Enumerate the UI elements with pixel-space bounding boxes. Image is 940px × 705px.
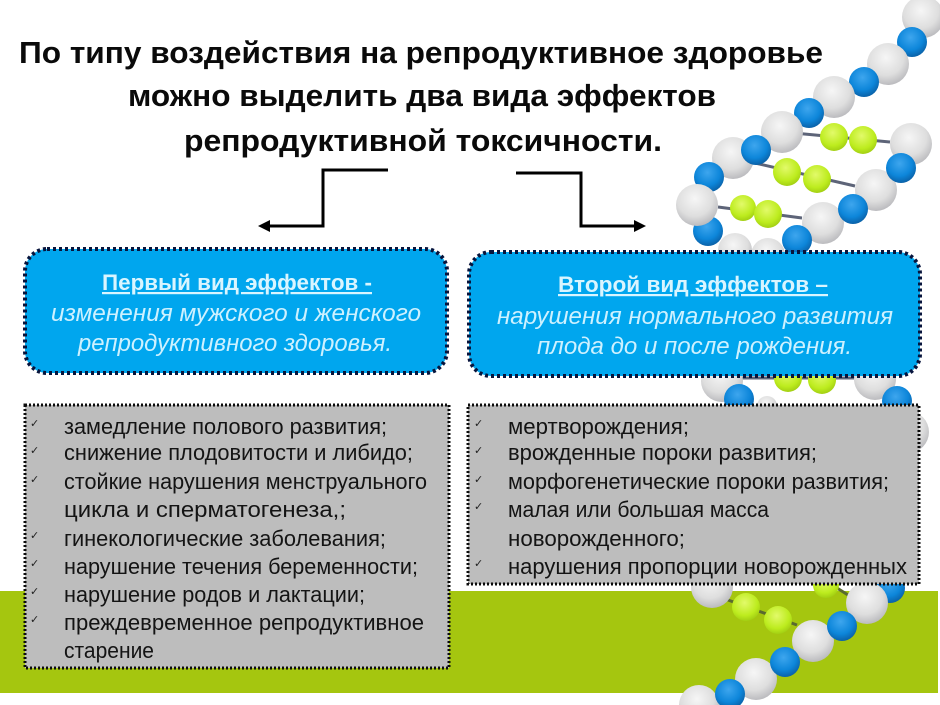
list text: second effects: мертворождения;	[508, 414, 689, 439]
green background band	[0, 591, 938, 693]
text block: first effect description: изменения мужского и женского	[51, 300, 421, 327]
list text: first effects: нарушение родов и лактации;	[64, 582, 365, 607]
list text: first effects: преждевременное репродуктивное	[64, 610, 424, 635]
list text: second effects: врожденные пороки развития;	[508, 440, 817, 465]
text block: second effect description: нарушения нормального развития	[497, 303, 893, 330]
heading: first effect type: Первый вид эффектов -	[102, 270, 372, 295]
check marks: first list: ✓	[30, 473, 39, 486]
check marks: first list: ✓	[30, 529, 39, 542]
arrow: to first effect type	[258, 170, 388, 232]
illustration: DNA helix, upper part	[676, 0, 940, 272]
check marks: second list: ✓	[474, 500, 483, 513]
title: По типу воздействия на репродуктивное здоровье	[19, 35, 823, 70]
title: репродуктивной токсичности.	[184, 123, 662, 158]
check marks: first list: ✓	[30, 417, 39, 430]
list text: first effects: нарушение течения беременности;	[64, 554, 418, 579]
check marks: second list: ✓	[474, 417, 483, 430]
list text: second effects: новорожденного;	[508, 526, 685, 551]
panel: second effects list	[468, 405, 919, 584]
list text: first effects: старение	[64, 638, 154, 663]
list text: first effects: стойкие нарушения менструального	[64, 469, 427, 494]
title: можно выделить два вида эффектов	[128, 78, 716, 113]
text block: second effect description	[497, 303, 893, 360]
check marks: second list: ✓	[474, 473, 483, 486]
check marks: second list: ✓	[474, 444, 483, 457]
list text: second effects: малая или большая масса	[508, 497, 770, 522]
panel: first effects list	[25, 405, 449, 668]
check marks: second list	[474, 417, 483, 570]
list text: second effects: нарушения пропорции новорожденных	[508, 554, 907, 579]
check marks: first list: ✓	[30, 557, 39, 570]
check marks: first list: ✓	[30, 585, 39, 598]
list text: second effects: морфогенетические пороки развития;	[508, 469, 889, 494]
check marks: first list	[30, 417, 39, 626]
list text: first effects	[64, 414, 427, 663]
list text: first effects: цикла и сперматогенеза,;	[64, 497, 346, 522]
illustration: DNA helix, middle part	[701, 358, 929, 453]
check marks: second list: ✓	[474, 557, 483, 570]
heading: second effect type: Второй вид эффектов –	[558, 272, 828, 297]
title	[19, 35, 823, 158]
panel: second effect type	[469, 252, 920, 376]
text block: second effect description: плода до и после рождения.	[537, 333, 852, 360]
illustration: DNA helix, lower part	[679, 566, 905, 705]
list text: second effects	[508, 414, 907, 579]
check marks: first list: ✓	[30, 444, 39, 457]
list text: first effects: замедление полового развития;	[64, 414, 387, 439]
panel: first effect type	[25, 249, 447, 373]
text block: first effect description	[51, 300, 421, 357]
text block: first effect description: репродуктивного здоровья.	[77, 330, 392, 357]
list text: first effects: гинекологические заболевания;	[64, 526, 386, 551]
check marks: first list: ✓	[30, 613, 39, 626]
arrow: to second effect type	[516, 173, 646, 232]
list text: first effects: снижение плодовитости и либидо;	[64, 440, 413, 465]
